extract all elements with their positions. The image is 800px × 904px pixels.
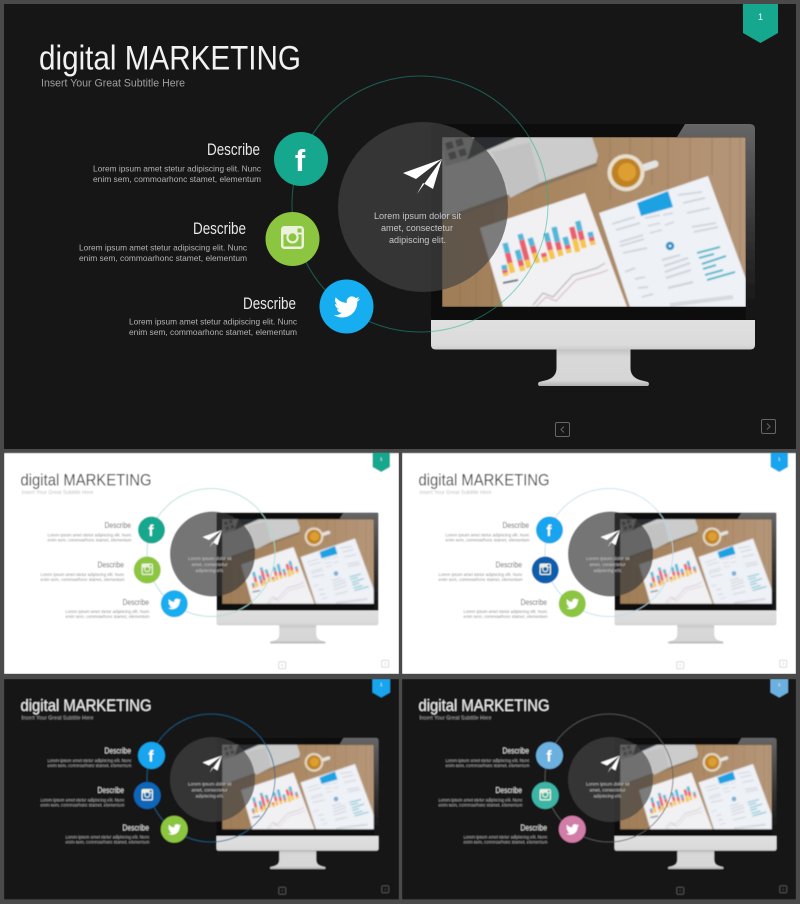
- item 1 text: [48, 746, 132, 768]
- item 3 text: [129, 294, 297, 337]
- page tag: 1: [380, 682, 383, 687]
- item 2 text: [40, 560, 125, 582]
- item 2 text: Describe: [496, 785, 522, 795]
- item 3 text: [66, 822, 150, 844]
- item 2 text: Describe: [496, 560, 522, 570]
- item 3 text: Describe: [122, 822, 149, 832]
- icon: paper plane: [600, 530, 620, 548]
- icon: twitter: [161, 590, 188, 617]
- center text: Lorem ipsum dolor sit: [586, 782, 630, 788]
- item 2 text: Lorem ipsum amet stetur adipiscing elit. Nunc: [40, 572, 124, 577]
- item 1 text: enim sem, commoarhonc stamet, elementum: [48, 538, 132, 542]
- icon: instagram: [266, 212, 320, 266]
- center text: amet, consectetur: [192, 562, 228, 568]
- center text: [586, 556, 630, 574]
- center text: [374, 211, 461, 246]
- slide: small light teal: [4, 452, 399, 674]
- center text: adipiscing elit.: [389, 235, 446, 246]
- item 3 text: Lorem ipsum amet stetur adipiscing elit. Nunc: [464, 609, 548, 614]
- item 2 text: [438, 560, 523, 582]
- page tag: [770, 679, 788, 698]
- ring: [292, 76, 548, 332]
- item 2 text: Describe: [98, 785, 124, 795]
- title: digital MARKETING: [20, 696, 152, 715]
- icon: instagram: [532, 782, 559, 809]
- monitor: [216, 738, 378, 869]
- item 3 text: Describe: [520, 822, 547, 832]
- center text: amet, consectetur: [590, 788, 626, 794]
- icon: twitter: [559, 816, 586, 843]
- item 1 text: enim sem, commoarhonc stamet, elementum: [446, 538, 530, 542]
- center text: Lorem ipsum dolor sit: [374, 211, 461, 222]
- icon: paper plane: [600, 756, 620, 773]
- icon: paper plane: [202, 530, 222, 548]
- ring: [147, 714, 275, 842]
- slide: small dark blue: [4, 679, 399, 900]
- page tag: 1: [778, 682, 781, 687]
- item 1 text: Describe: [207, 140, 260, 159]
- slide: small light blue: [402, 452, 796, 674]
- icon: twitter: [161, 816, 188, 843]
- item 2 text: [438, 785, 523, 808]
- icon: instagram: [532, 556, 559, 584]
- central grey disc: [568, 737, 653, 822]
- nav: previous: [556, 422, 570, 436]
- center text: adipiscing elit.: [594, 794, 622, 800]
- item 1 text: enim sem, commoarhonc stamet, elementum: [446, 763, 530, 768]
- central grey disc: [568, 512, 653, 596]
- icon: facebook: [536, 516, 563, 544]
- center text: [188, 556, 232, 574]
- icon: facebook: [536, 742, 563, 769]
- slide: large dark: [4, 4, 796, 449]
- item 2 text: enim sem, commoarhonc stamet, elementum: [438, 802, 523, 808]
- item 3 text: [464, 822, 548, 844]
- item 3 text: enim sem, commoarhonc stamet, elementum: [66, 840, 150, 844]
- item 3 text: Describe: [243, 294, 296, 313]
- item 3 text: Describe: [122, 597, 149, 607]
- item 1 text: Lorem ipsum amet stetur adipiscing elit. Nunc: [93, 164, 261, 174]
- title: digital MARKETING: [39, 40, 301, 78]
- item 3 text: Lorem ipsum amet stetur adipiscing elit. Nunc: [129, 316, 297, 326]
- slide content: [20, 452, 390, 669]
- monitor: [614, 512, 776, 644]
- center text: Lorem ipsum dolor sit: [586, 556, 630, 562]
- item 1 text: Lorem ipsum amet stetur adipiscing elit. Nunc: [48, 758, 132, 763]
- icon: facebook: [274, 132, 328, 186]
- subtitle: Insert Your Great Subtitle Here: [420, 715, 492, 721]
- item 1 text: Describe: [104, 520, 131, 530]
- slide content: [20, 679, 390, 894]
- nav: next: [762, 420, 776, 434]
- page tag: 1: [758, 12, 763, 22]
- icon: twitter: [559, 590, 586, 617]
- item 2 text: Describe: [98, 560, 124, 570]
- item 1 text: Describe: [502, 746, 529, 756]
- center text: adipiscing elit.: [594, 568, 622, 574]
- item 2 text: Lorem ipsum amet stetur adipiscing elit. Nunc: [40, 797, 124, 802]
- item 2 text: enim sem, commoarhonc stamet, elementum: [438, 577, 523, 582]
- item 3 text: Lorem ipsum amet stetur adipiscing elit. Nunc: [464, 834, 548, 839]
- center text: [188, 782, 232, 800]
- icon: paper plane: [403, 159, 442, 194]
- center text: amet, consectetur: [192, 788, 228, 794]
- center text: amet, consectetur: [590, 562, 626, 568]
- icon: instagram: [134, 782, 161, 809]
- item 1 text: enim sem, commoarhonc stamet, elementum: [93, 174, 261, 184]
- ring: [147, 488, 275, 616]
- slide: small dark pastel: [402, 679, 796, 900]
- page tag: 1: [778, 456, 781, 462]
- item 2 text: Lorem ipsum amet stetur adipiscing elit. Nunc: [79, 242, 247, 252]
- icon: twitter: [320, 280, 374, 334]
- item 2 text: Describe: [193, 219, 246, 238]
- title: digital MARKETING: [418, 696, 550, 715]
- item 3 text: Describe: [520, 597, 547, 607]
- page tag: [770, 452, 788, 472]
- item 1 text: Lorem ipsum amet stetur adipiscing elit. Nunc: [446, 758, 530, 763]
- item 1 text: Lorem ipsum amet stetur adipiscing elit. Nunc: [48, 532, 132, 537]
- nav: previous: [279, 662, 286, 669]
- ring: [545, 488, 673, 616]
- center text: Lorem ipsum dolor sit: [188, 556, 232, 562]
- item 2 text: [79, 219, 247, 263]
- item 1 text: [446, 746, 530, 768]
- center text: amet, consectetur: [381, 223, 454, 234]
- item 1 text: Describe: [104, 746, 131, 756]
- icon: facebook: f: [148, 748, 154, 766]
- item 3 text: Lorem ipsum amet stetur adipiscing elit. Nunc: [66, 834, 150, 839]
- center text: adipiscing elit.: [196, 794, 224, 800]
- nav: previous: [279, 887, 286, 894]
- slide content: [418, 452, 788, 669]
- icon: facebook: f: [148, 523, 154, 540]
- subtitle: Insert Your Great Subtitle Here: [420, 490, 492, 496]
- subtitle: Insert Your Great Subtitle Here: [22, 490, 94, 496]
- nav: next: [780, 886, 787, 893]
- nav: previous: [677, 662, 684, 669]
- central grey disc: [170, 512, 255, 596]
- center text: adipiscing elit.: [196, 568, 224, 574]
- nav: next: [780, 660, 787, 667]
- item 1 text: [93, 140, 261, 184]
- page tag: 1: [380, 456, 383, 462]
- icon: instagram: [134, 556, 161, 584]
- icon: facebook: f: [295, 143, 306, 178]
- item 3 text: enim sem, commoarhonc stamet, elementum: [464, 840, 548, 844]
- item 1 text: [48, 520, 132, 542]
- item 1 text: [446, 520, 530, 542]
- item 3 text: [464, 597, 548, 619]
- nav: previous: [677, 887, 684, 894]
- center text: Lorem ipsum dolor sit: [188, 782, 232, 788]
- monitor: [614, 738, 776, 869]
- title: digital MARKETING: [418, 470, 550, 489]
- item 3 text: [66, 597, 150, 619]
- icon: facebook: f: [546, 748, 552, 766]
- item 3 text: Lorem ipsum amet stetur adipiscing elit. Nunc: [66, 609, 150, 614]
- item 3 text: enim sem, commoarhonc stamet, elementum: [66, 614, 150, 619]
- monitor: [431, 124, 755, 386]
- central grey disc: [170, 737, 255, 822]
- nav: next: [382, 660, 389, 667]
- page tag: [372, 452, 390, 472]
- center text: [586, 782, 630, 800]
- page tag: [743, 4, 778, 43]
- central grey disc: [338, 122, 508, 292]
- item 2 text: enim sem, commoarhonc stamet, elementum: [40, 577, 125, 582]
- item 2 text: enim sem, commoarhonc stamet, elementum: [79, 253, 247, 263]
- item 3 text: enim sem, commoarhonc stamet, elementum: [129, 327, 297, 337]
- item 1 text: enim sem, commoarhonc stamet, elementum: [48, 763, 132, 768]
- nav: next: [382, 886, 389, 893]
- page tag: [372, 679, 390, 698]
- icon: paper plane: [202, 756, 222, 773]
- monitor: [216, 512, 378, 644]
- item 1 text: Describe: [502, 520, 529, 530]
- icon: facebook: [138, 742, 165, 769]
- item 2 text: Lorem ipsum amet stetur adipiscing elit. Nunc: [438, 572, 522, 577]
- item 2 text: Lorem ipsum amet stetur adipiscing elit. Nunc: [438, 797, 522, 802]
- item 2 text: enim sem, commoarhonc stamet, elementum: [40, 802, 125, 808]
- item 1 text: Lorem ipsum amet stetur adipiscing elit. Nunc: [446, 532, 530, 537]
- ring: [545, 714, 673, 842]
- subtitle: Insert Your Great Subtitle Here: [22, 715, 94, 721]
- title: digital MARKETING: [20, 470, 152, 489]
- item 3 text: enim sem, commoarhonc stamet, elementum: [464, 614, 548, 619]
- icon: facebook: [138, 516, 165, 544]
- icon: facebook: f: [546, 523, 552, 540]
- item 2 text: [40, 785, 125, 808]
- slide content: [418, 679, 788, 894]
- subtitle: Insert Your Great Subtitle Here: [41, 78, 185, 90]
